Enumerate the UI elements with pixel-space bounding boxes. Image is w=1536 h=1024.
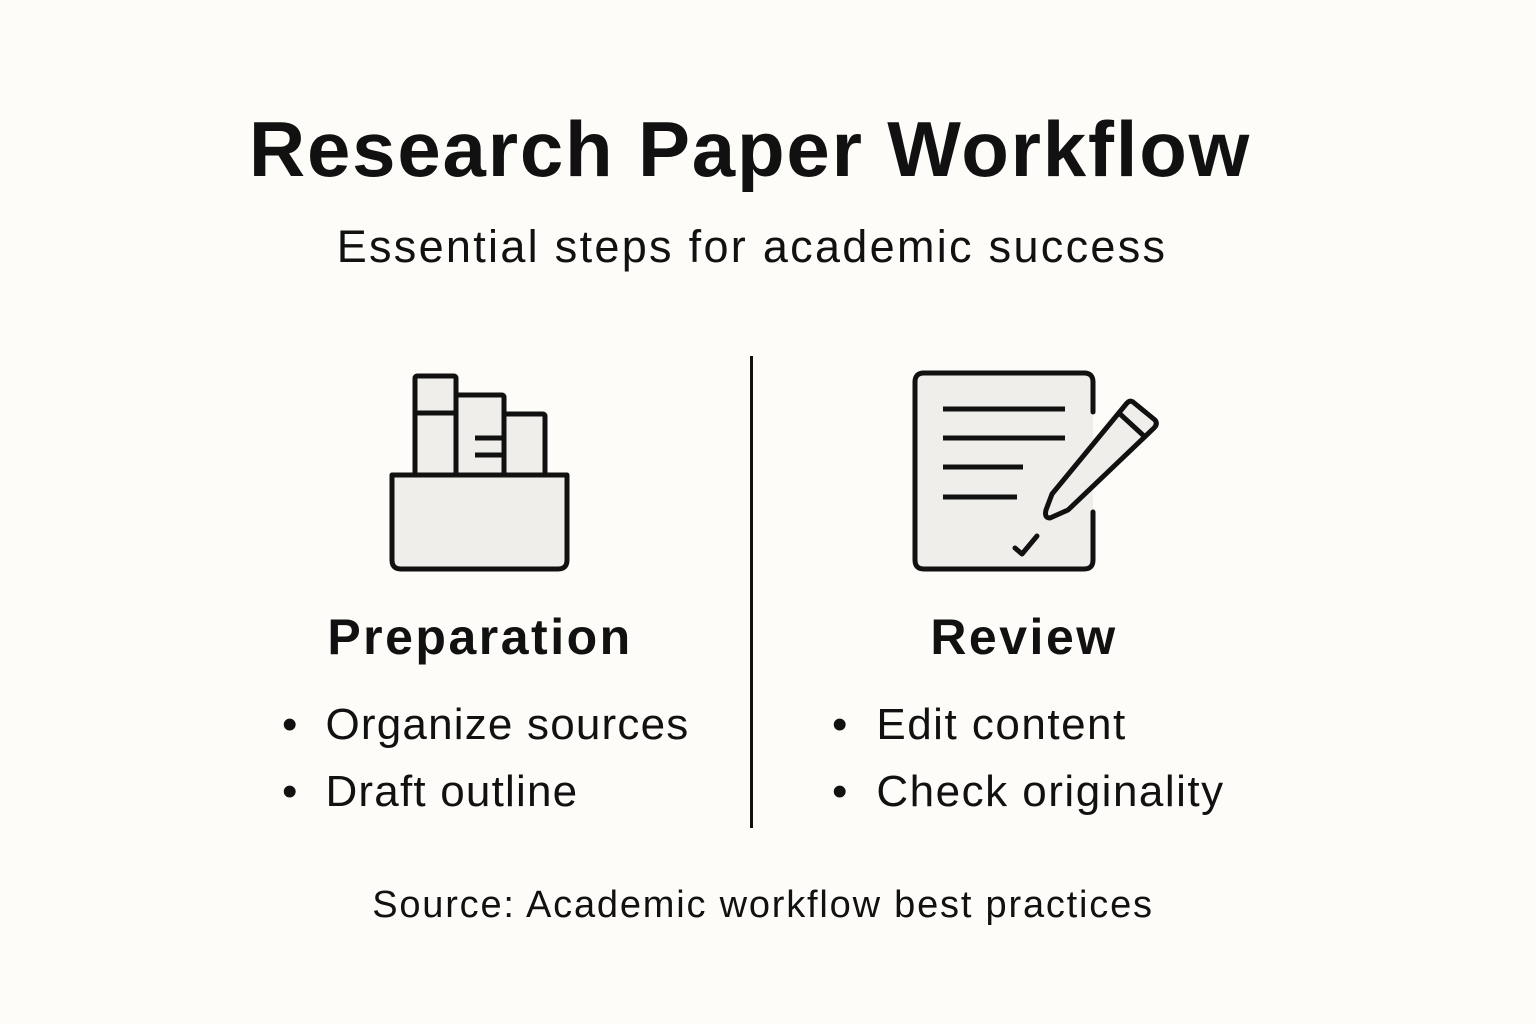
title: Research Paper Workflow	[249, 105, 1251, 193]
divider	[750, 356, 753, 828]
source: Source: Academic workflow best practices	[372, 884, 1154, 926]
heading: Preparation: Preparation	[327, 609, 633, 665]
heading: Review: Review	[930, 609, 1118, 665]
list: review: • Edit content	[832, 700, 1127, 749]
subtitle: Essential steps for academic success	[337, 221, 1167, 272]
list: review: • Check originality	[832, 767, 1225, 816]
list: review	[832, 700, 1225, 816]
list: preparation: • Draft outline	[282, 767, 578, 816]
list: preparation: • Organize sources	[282, 700, 689, 749]
list: preparation	[282, 700, 689, 816]
